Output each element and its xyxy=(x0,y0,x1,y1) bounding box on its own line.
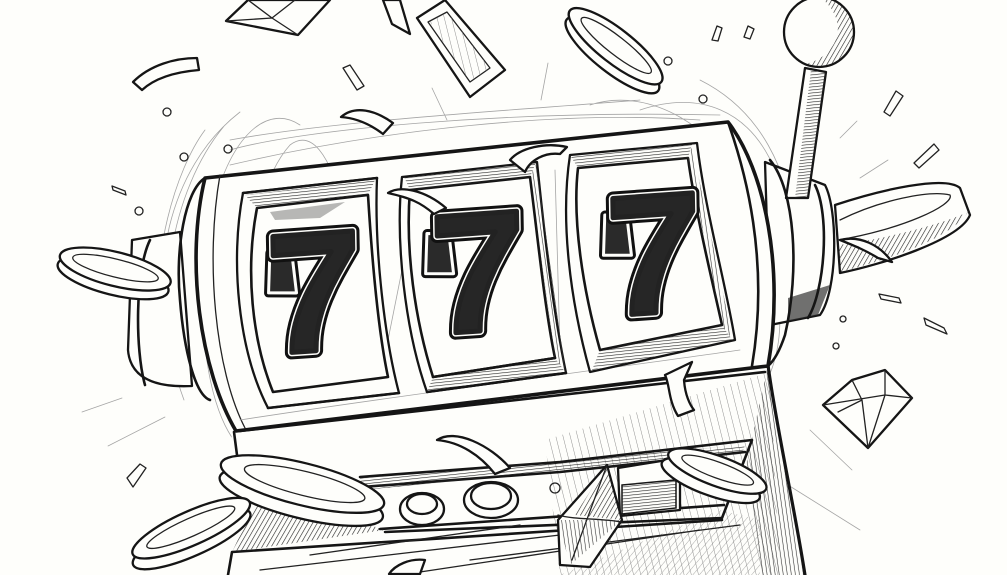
reel digit 7 left: 7 xyxy=(265,194,363,391)
slot machine cabinet xyxy=(225,365,805,575)
gem top left xyxy=(226,0,330,35)
right side axle xyxy=(765,162,834,325)
lever xyxy=(784,0,854,198)
reel digit 7 right: 7 xyxy=(605,156,703,353)
coin behind right xyxy=(835,183,970,273)
reel digit 7 middle: 7 xyxy=(429,175,527,371)
left side axle xyxy=(128,232,192,386)
window 1 xyxy=(237,178,399,408)
coin lower right xyxy=(657,438,771,513)
reel digit 7 right: 7 xyxy=(605,156,703,353)
coin lower left xyxy=(122,487,261,575)
reel digit 7 middle: 7 xyxy=(429,175,527,371)
coin lower large xyxy=(213,443,391,538)
reel digit 7 left: 7 xyxy=(265,194,363,391)
coin top xyxy=(554,0,674,104)
buttons xyxy=(400,482,560,525)
reel digit 7 middle: 7 xyxy=(429,175,527,371)
reel digit 7 left: 7 xyxy=(265,194,363,391)
gem right xyxy=(823,370,912,448)
window 3 xyxy=(566,143,735,372)
gem bar top xyxy=(417,0,505,97)
motion lines xyxy=(82,63,888,530)
window 2 xyxy=(400,162,566,392)
drum xyxy=(179,114,793,431)
reel digit 7 right: 7 xyxy=(605,156,703,353)
gem lower centre xyxy=(558,465,622,567)
coin left xyxy=(54,239,175,308)
vertical coin slot xyxy=(618,458,680,516)
